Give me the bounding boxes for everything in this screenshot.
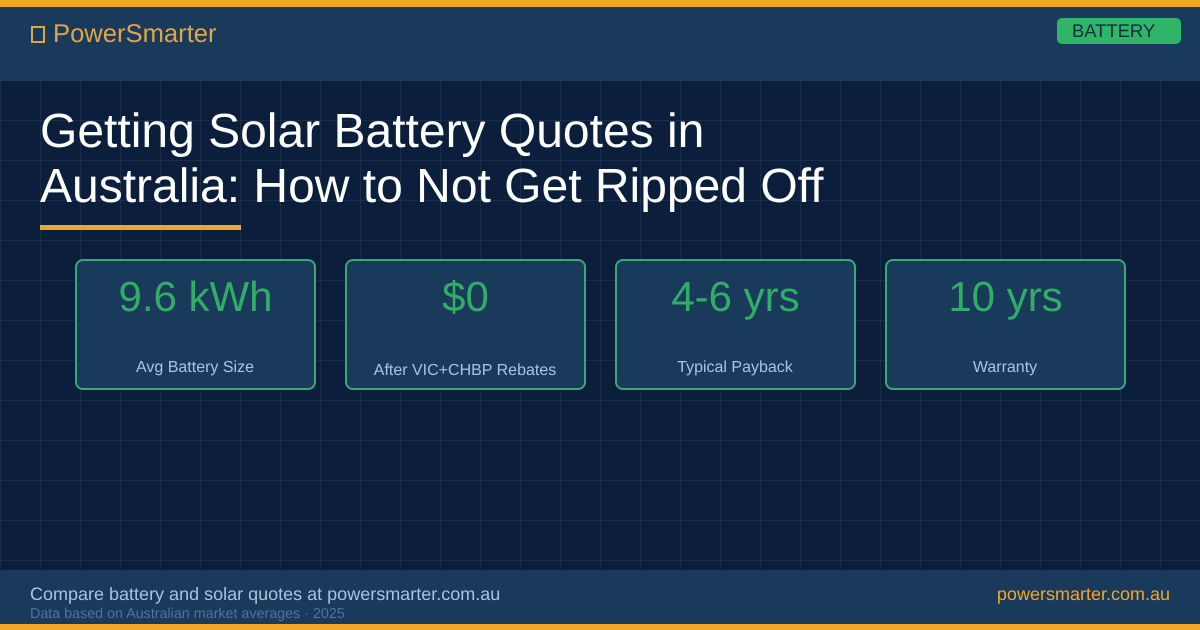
title [40,105,824,213]
title: Getting Solar Battery Quotes in [40,105,704,158]
stat value: 4-6 yrs [671,273,800,320]
footer call to action: Compare battery and solar quotes at powersmarter.com.au [30,584,500,604]
footer url: powersmarter.com.au [997,584,1170,604]
stat label: Typical Payback [677,359,793,376]
footer bar [0,570,1200,630]
stat value: $0 [442,273,489,320]
category badge [1057,18,1181,44]
header bar [0,0,1200,81]
stat value: 9.6 kWh [118,273,273,320]
footer data note: Data based on Australian market averages · 2025 [30,606,345,622]
stat card: rebates [345,259,586,390]
title underline [40,225,241,230]
stat card: warranty [885,259,1126,390]
stat label: Warranty [973,359,1037,376]
stat label: After VIC+CHBP Rebates [374,362,556,379]
stat label: Avg Battery Size [136,359,254,376]
stat card: payback [615,259,856,390]
logo [31,20,217,48]
stat card: battery size [75,259,316,390]
logo wordmark: PowerSmarter [53,20,217,48]
category badge: BATTERY [1072,20,1155,41]
stat value: 10 yrs [948,273,1063,320]
title: Australia: How to Not Get Ripped Off [40,160,823,213]
icon: logo box [31,26,45,43]
